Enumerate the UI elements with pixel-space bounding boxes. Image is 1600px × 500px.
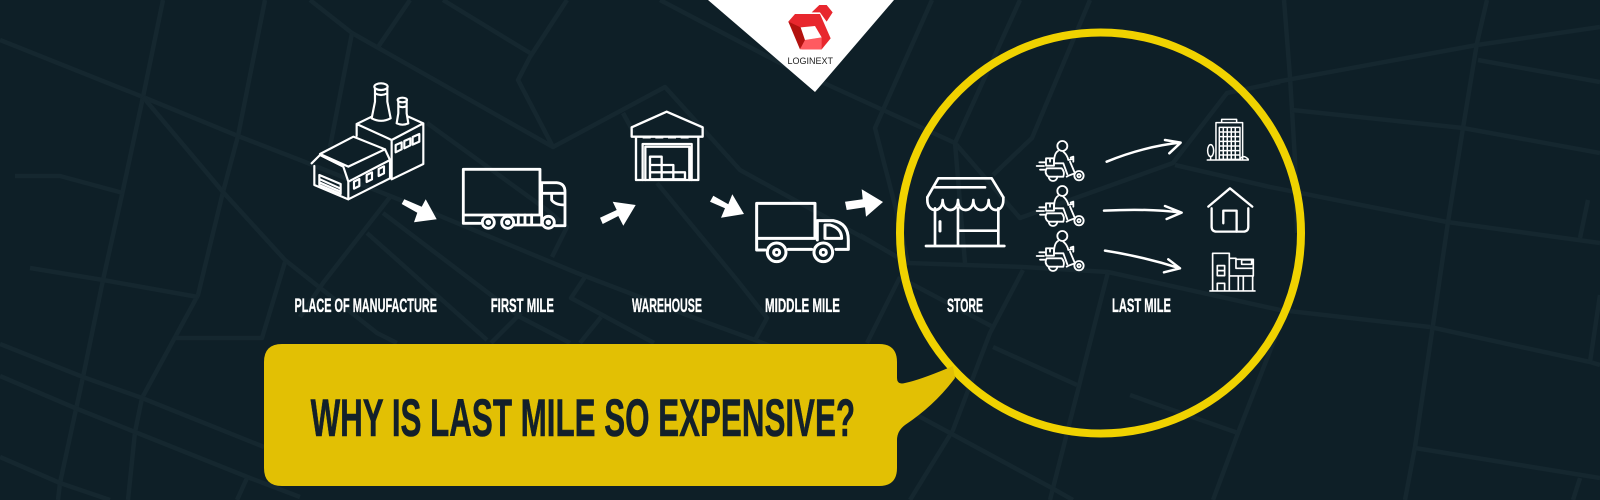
icon: apartment block [1210,253,1255,291]
magnifier circle [900,32,1301,434]
label: place of manufacture: PLACE OF MANUFACTURE [294,296,437,317]
headline: WHY IS LAST MILE SO EXPENSIVE? [311,389,855,448]
logo mark [788,5,833,49]
arrow: middle mile to store [845,189,883,217]
icon: warehouse [632,112,703,180]
callout: speech bubble [264,344,955,486]
icon: delivery scooter 1 [1037,141,1084,181]
label: store: STORE [947,296,983,317]
arrow: first mile to warehouse [600,202,636,226]
label: first mile: FIRST MILE [491,296,554,317]
icon: delivery scooter 3 [1037,231,1084,271]
arrow: factory to first mile [402,199,437,222]
arrow: to house [1104,206,1182,219]
arrow: to shop [1105,251,1180,272]
logo badge [708,0,894,92]
icon: delivery scooter 2 [1037,186,1084,226]
icon: store [926,178,1004,246]
icon: large truck [463,169,565,228]
label: last mile: LAST MILE [1112,296,1171,317]
logo wordmark: LOGINEXT [788,56,833,67]
icon: house [1208,188,1252,232]
icon: small truck [757,203,848,262]
icon: factory [312,83,423,199]
label: warehouse: WAREHOUSE [632,296,702,317]
arrow: to office [1107,140,1181,162]
icon: office building [1207,119,1248,160]
arrow: warehouse to middle mile [710,194,744,218]
label: middle mile: MIDDLE MILE [765,296,840,317]
